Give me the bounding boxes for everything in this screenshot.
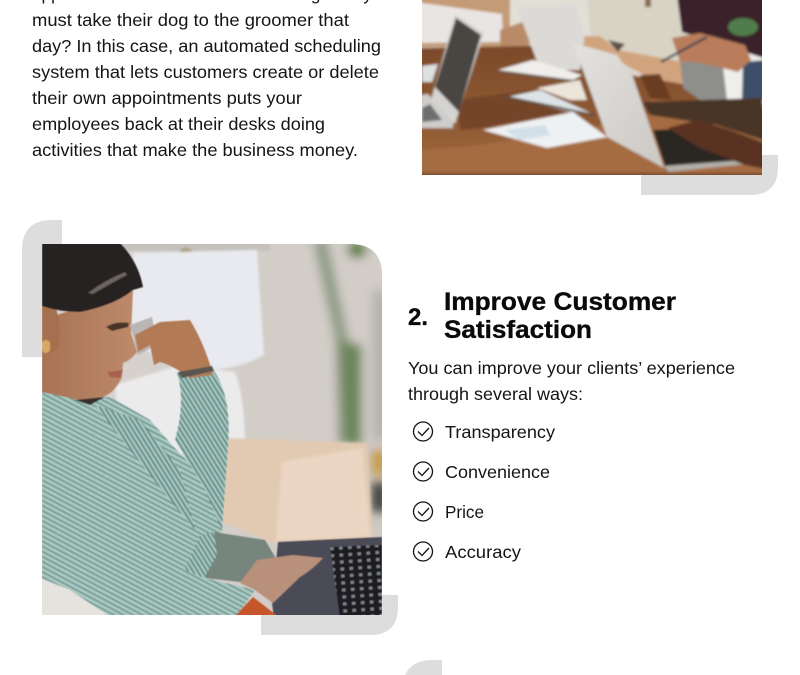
text block: automated scheduling paragraph <box>32 0 381 160</box>
photo: team with laptops at a wooden table <box>422 0 762 175</box>
item: accuracy: Accuracy <box>445 542 521 562</box>
item: transparency: Transparency <box>445 422 555 442</box>
heading: section number: 2. <box>408 304 428 331</box>
photo: woman in a mint sweater thinking at her laptop <box>38 238 390 618</box>
text block: automated scheduling paragraph: activities that make the business money. <box>32 140 358 160</box>
decorative block: behind woman photo, bottom right <box>261 595 398 635</box>
text block: section introduction: through several ways: <box>408 384 583 404</box>
item: accuracy <box>414 542 521 562</box>
heading: improve customer satisfaction: Satisfaction <box>444 316 592 344</box>
text block: section introduction <box>408 358 735 404</box>
heading: improve customer satisfaction <box>444 288 676 344</box>
sweater <box>42 390 255 618</box>
decorative block: behind team photo <box>641 155 778 195</box>
text block: automated scheduling paragraph: must take their dog to the groomer that <box>32 10 349 30</box>
decorative block: behind woman photo, top left <box>22 220 62 357</box>
text block: section introduction: You can improve your clients’ experience <box>408 358 735 378</box>
text block: automated scheduling paragraph: system that lets customers create or delete <box>32 62 379 82</box>
shirt, hand and laptop <box>205 532 280 582</box>
text block: automated scheduling paragraph: day? In this case, an automated scheduling <box>32 36 381 56</box>
decorative block: next section, cut off at the bottom <box>405 660 442 675</box>
item: price: Price <box>445 502 484 522</box>
face and hair <box>42 290 137 402</box>
item: price <box>414 502 484 522</box>
checklist <box>414 422 555 562</box>
item: convenience: Convenience <box>445 462 550 482</box>
background: lamp, plant and sofa <box>310 244 382 520</box>
text block: automated scheduling paragraph: employees back at their desks doing <box>32 114 325 134</box>
heading: improve customer satisfaction: Improve Customer <box>444 288 676 316</box>
text block: automated scheduling paragraph: their own appointments puts your <box>32 88 302 108</box>
